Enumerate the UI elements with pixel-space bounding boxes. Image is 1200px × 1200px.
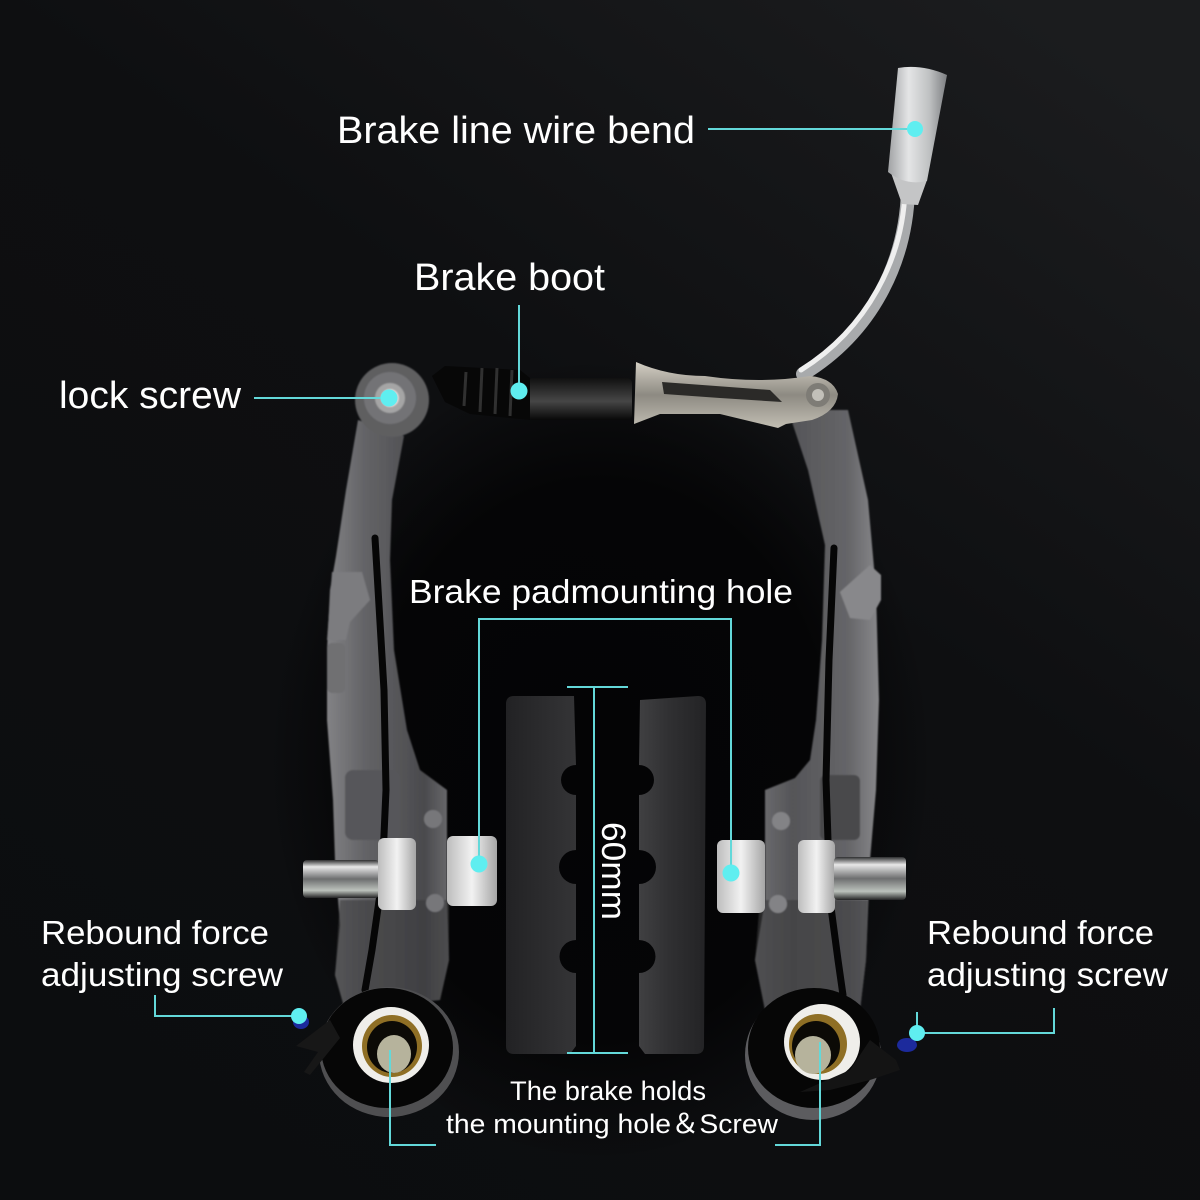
callout: left rebound force adjusting screw [41, 914, 307, 1024]
callout: right rebound force adjusting screw [909, 914, 1168, 1041]
right mounting post [717, 840, 906, 913]
callout: brake holds the mounting hole and screw: the mounting hole＆Screw [446, 1109, 779, 1139]
left brake pad [506, 696, 576, 1054]
right spring housing [745, 988, 917, 1120]
callout: right rebound force adjusting screw: adjusting screw [927, 956, 1168, 993]
left spring housing [293, 987, 459, 1117]
left brake arm [327, 363, 449, 1010]
callout: brake boot [414, 257, 605, 400]
dimension: 60mm pad length [567, 687, 632, 1053]
wire bend tube [801, 67, 947, 374]
callout: left rebound force adjusting screw: Rebound force [41, 914, 269, 951]
callout: brake holds the mounting hole and screw [390, 1042, 820, 1145]
right brake pad [639, 696, 706, 1054]
callout: brake boot: Brake boot [414, 257, 605, 299]
callout: brake holds the mounting hole and screw: The brake holds [510, 1076, 706, 1106]
callout: left rebound force adjusting screw: adjusting screw [41, 956, 283, 993]
callout: brake pad mounting hole [409, 573, 793, 882]
callout: brake line wire bend: Brake line wire bend [337, 110, 695, 152]
callout: right rebound force adjusting screw: Rebound force [927, 914, 1154, 951]
left mounting post [303, 836, 497, 910]
brake boot [432, 366, 632, 420]
callout: lock screw [59, 375, 398, 417]
callout: brake line wire bend [337, 110, 923, 152]
return springs [365, 538, 843, 995]
right brake arm [755, 410, 881, 1010]
cable lever [634, 362, 838, 428]
dimension: 60mm pad length: 60mm [594, 822, 632, 920]
callout: lock screw: lock screw [59, 375, 242, 417]
callout: brake pad mounting hole: Brake padmounting hole [409, 573, 793, 610]
brake assembly [293, 67, 947, 1120]
